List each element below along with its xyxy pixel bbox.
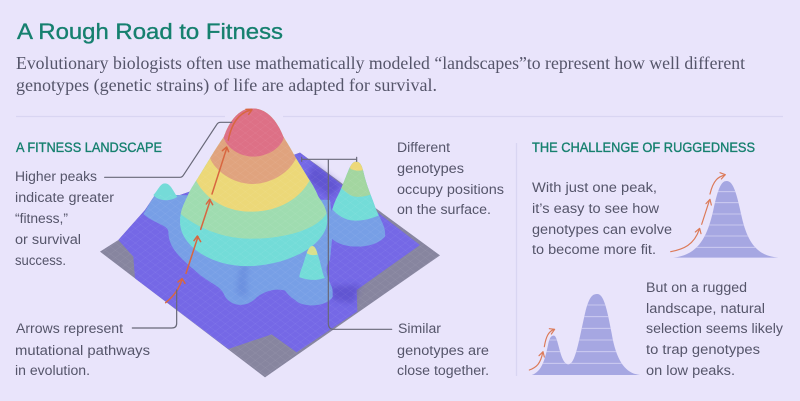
text: rugged landscape: But on a rugged — [646, 280, 747, 295]
arrows: single peak — [671, 173, 725, 252]
chart: rugged peaks — [527, 294, 643, 375]
mesh overlay — [100, 108, 440, 377]
text: one peak: to become more fit. — [532, 242, 656, 257]
title: A Rough Road to Fitness — [17, 19, 283, 44]
text: one peak: it’s easy to see how — [532, 201, 659, 216]
landscape illustration — [100, 100, 440, 377]
arrows: rugged peaks — [529, 329, 555, 370]
text: rugged landscape: on low peaks. — [646, 363, 735, 378]
low surface — [118, 153, 420, 352]
label: higher peaks: “fitness,” — [15, 211, 68, 226]
heading: the challenge of ruggedness: THE CHALLENGE OF RUGGEDNESS — [532, 140, 755, 155]
label: different genotypes: on the surface. — [397, 202, 491, 217]
text: rugged landscape: landscape, natural — [646, 301, 765, 316]
intro text — [16, 53, 745, 95]
small left peak — [153, 183, 177, 200]
label: arrows: mutational pathways — [15, 343, 150, 358]
label: higher peaks: or survival — [15, 232, 81, 247]
label: different genotypes — [397, 140, 504, 217]
label: higher peaks — [15, 169, 115, 268]
label: different genotypes: occupy positions — [397, 182, 504, 197]
evolution arrows on big mountain — [166, 109, 252, 303]
divider — [16, 116, 783, 376]
label: higher peaks: success. — [15, 253, 66, 268]
label: similar genotypes: Similar — [398, 321, 442, 336]
label: similar genotypes: close together. — [397, 363, 489, 378]
label: arrows: in evolution. — [15, 363, 90, 378]
text: rugged landscape: selection seems likely — [646, 321, 783, 336]
text: rugged landscape: to trap genotypes — [646, 342, 760, 357]
middle peak — [296, 246, 333, 306]
label: different genotypes: Different — [397, 140, 450, 155]
text: one peak: With just one peak, — [532, 180, 657, 195]
label: higher peaks: indicate greater — [15, 190, 115, 205]
intro text: genotypes (genetic strains) of life are adapted for survival. — [16, 75, 437, 95]
label: higher peaks: Higher peaks — [15, 169, 97, 184]
heading: a fitness landscape: A FITNESS LANDSCAPE — [16, 140, 162, 155]
base plane — [100, 153, 440, 377]
text: one peak — [532, 180, 672, 257]
intro text: Evolutionary biologists often use mathematically modeled “landscapes”to represent how well different — [16, 53, 745, 73]
leader lines — [105, 122, 392, 329]
chart: single peak — [670, 173, 783, 258]
big mountain bands — [180, 108, 328, 266]
label: arrows — [15, 321, 150, 378]
label: different genotypes: genotypes — [397, 161, 464, 176]
valley shadows — [307, 163, 360, 303]
label: similar genotypes: genotypes are — [397, 343, 489, 358]
text: one peak: genotypes can evolve — [532, 222, 672, 237]
right peak — [332, 162, 386, 246]
label: similar genotypes — [397, 321, 489, 378]
text: rugged landscape — [646, 280, 783, 378]
label: arrows: Arrows represent — [16, 321, 123, 336]
blue contour — [143, 195, 333, 305]
